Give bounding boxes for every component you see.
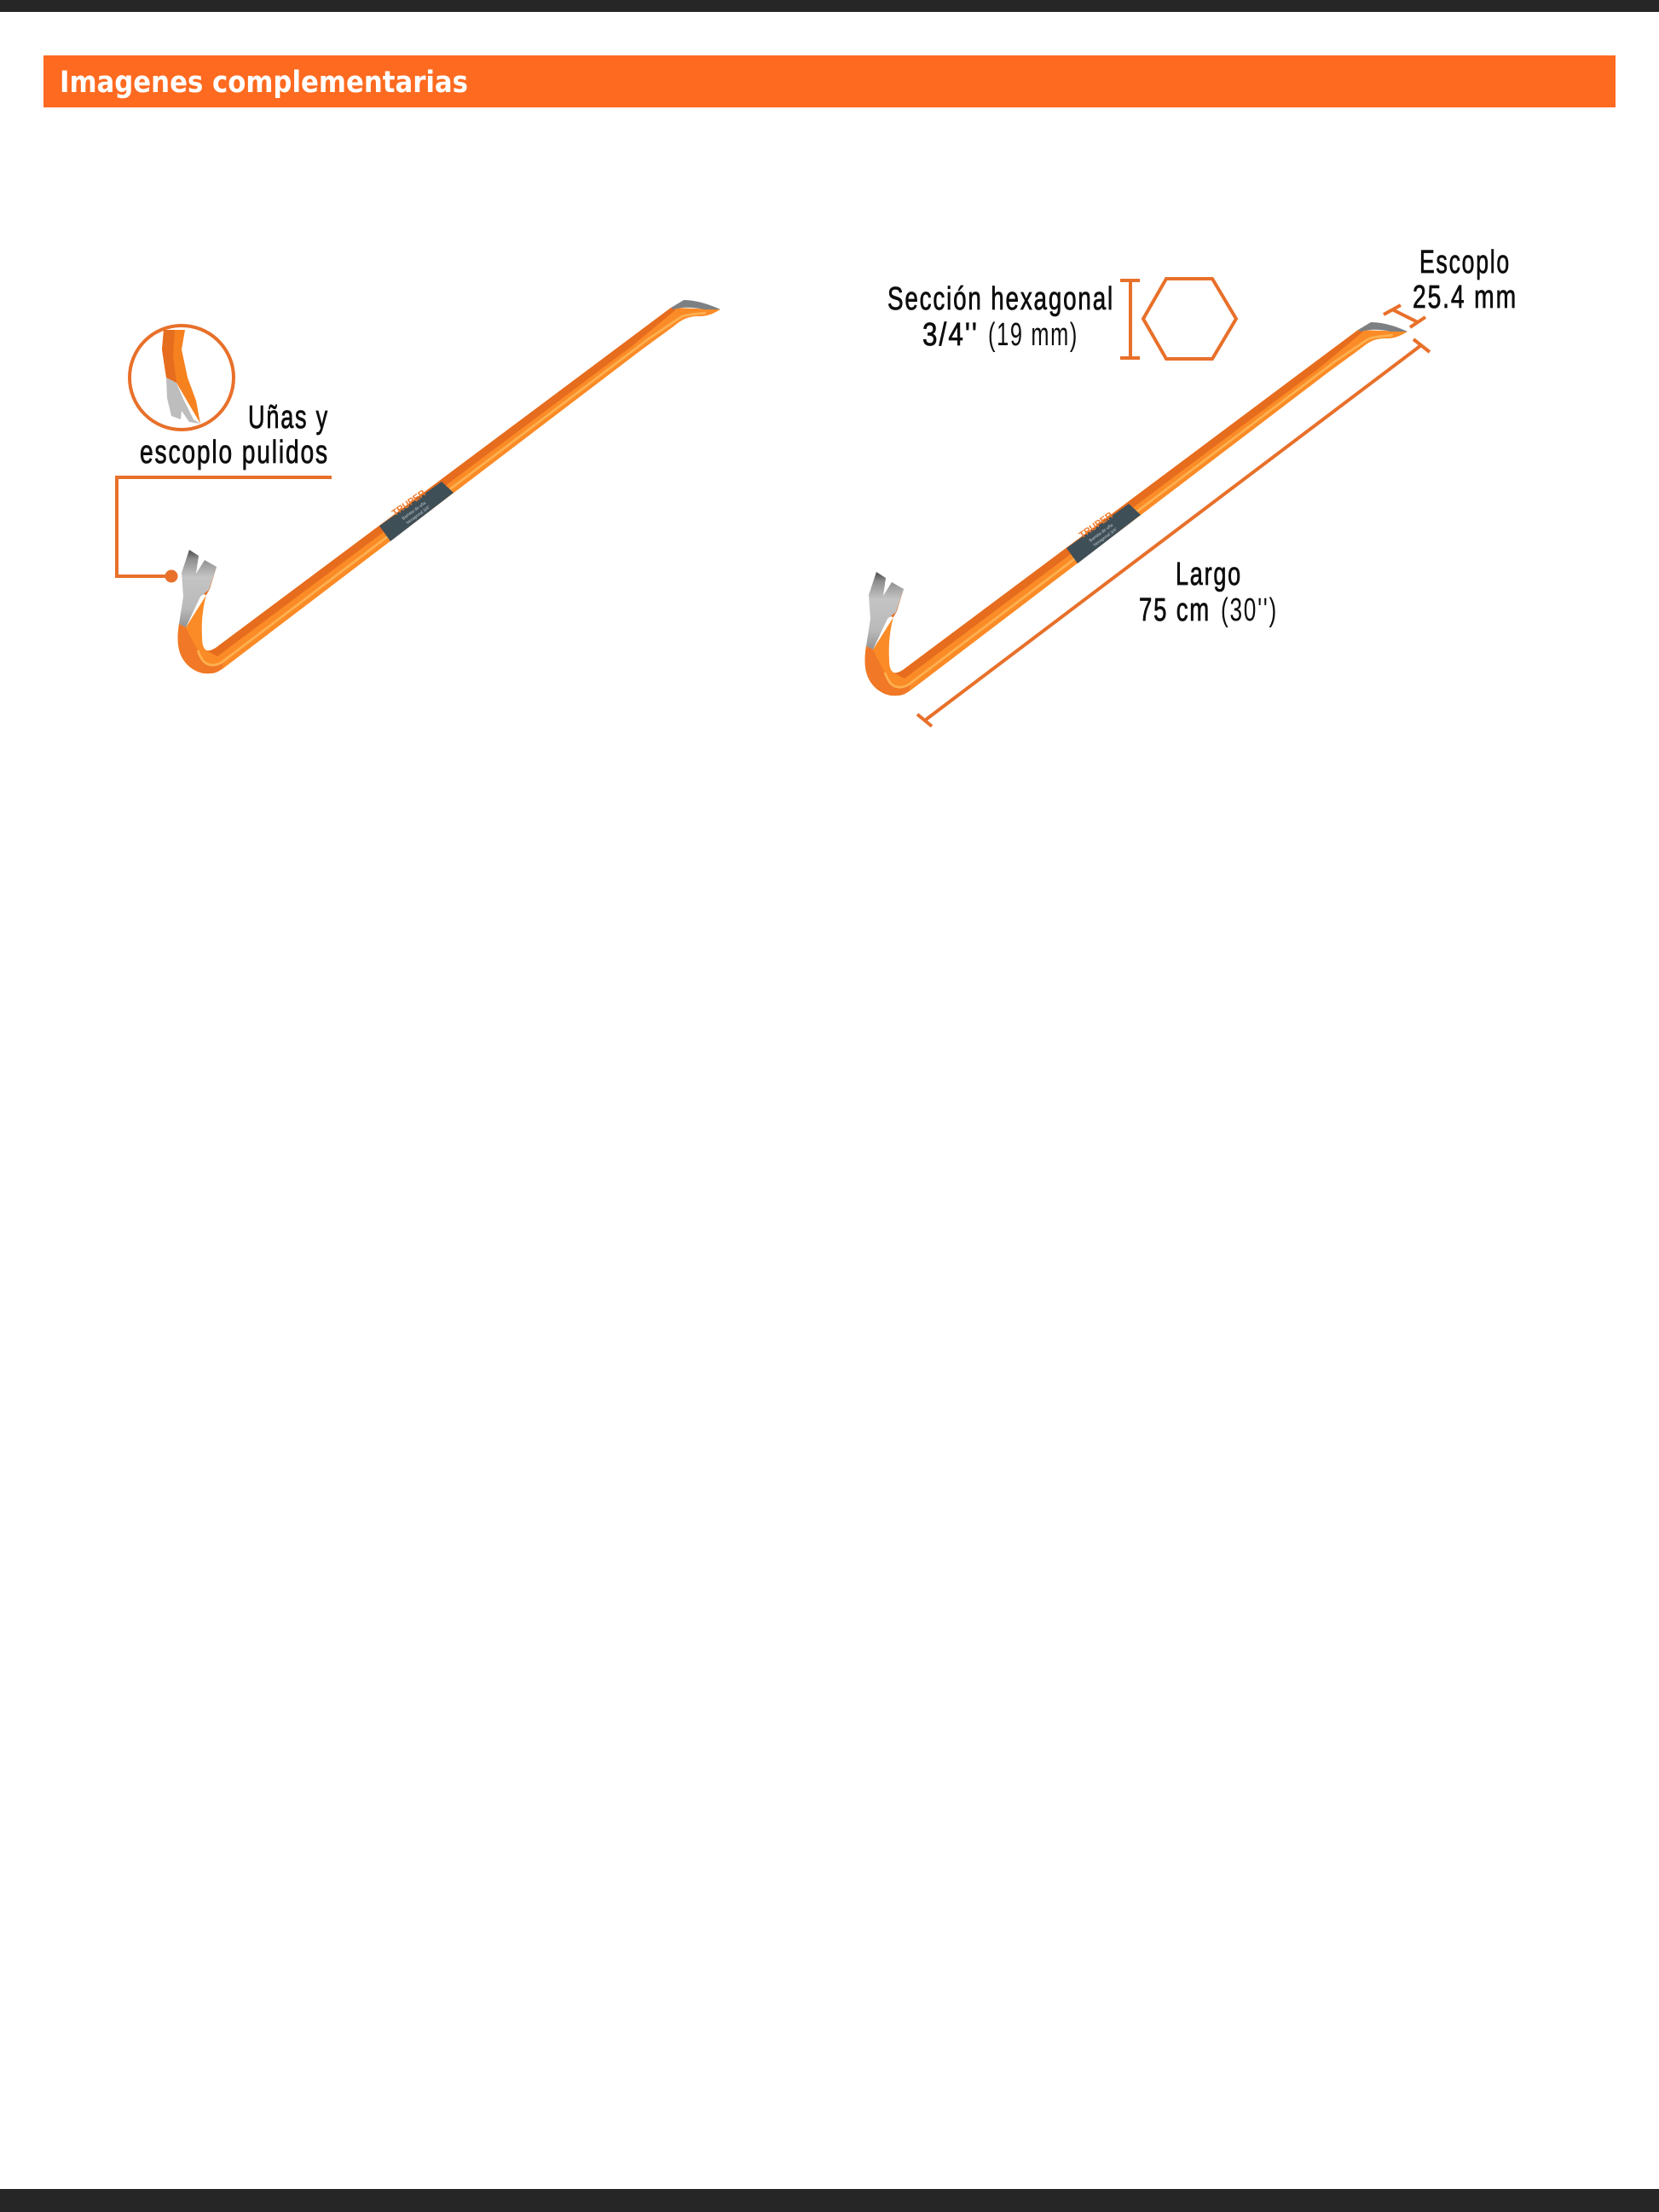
product label band: hexagonal 3/4" — [406, 505, 431, 526]
text: Escoplo 25.4 mm: 25.4 mm — [1413, 280, 1517, 315]
product label band: hexagonal 3/4" — [1093, 527, 1119, 548]
text: Sección hexagonal 3/4" (19 mm): 3/4'' — [922, 317, 979, 353]
product label band — [379, 482, 454, 541]
text: Escoplo 25.4 mm: Escoplo — [1419, 245, 1511, 280]
bottom bar — [0, 2189, 1659, 2212]
text: Sección hexagonal 3/4" (19 mm) — [887, 281, 1114, 353]
panel: left crowbar with polished claws callout — [117, 300, 720, 673]
icon: hexagon section with dimension — [1120, 279, 1236, 359]
panel: right crowbar with dimensions — [865, 245, 1517, 726]
text: Sección hexagonal 3/4" (19 mm): (19 mm) — [988, 317, 1078, 353]
text: Uñas y escoplo pulidos: Uñas y — [248, 400, 329, 436]
callout leader line — [117, 477, 332, 583]
product label band: TRUPER — [1078, 511, 1115, 540]
product label band — [1066, 504, 1141, 563]
banner: Imagenes complementarias: Imagenes complementarias — [60, 66, 468, 100]
dimension: overall length — [917, 339, 1430, 726]
dimension: chisel width — [1384, 305, 1425, 327]
text: Sección hexagonal 3/4" (19 mm): Sección hexagonal — [887, 281, 1114, 317]
text: Largo 75 cm (30"): (30'') — [1221, 592, 1278, 628]
product label band: TRUPER — [390, 488, 428, 518]
text: Largo 75 cm (30"): Largo — [1176, 557, 1242, 592]
text: Uñas y escoplo pulidos — [140, 400, 329, 471]
text: Escoplo 25.4 mm — [1413, 245, 1517, 315]
text: Largo 75 cm (30") — [1139, 557, 1278, 628]
product label band: Barreta de uña — [402, 500, 427, 522]
product label band: Barreta de uña — [1089, 523, 1114, 544]
top bar — [0, 0, 1659, 12]
text: Largo 75 cm (30"): 75 cm — [1139, 592, 1211, 628]
icon: claw detail circle — [130, 326, 234, 430]
banner: Imagenes complementarias — [43, 55, 1616, 107]
crowbar: left — [178, 300, 720, 673]
text: Uñas y escoplo pulidos: escoplo pulidos — [140, 435, 329, 471]
crowbar: right — [865, 322, 1408, 696]
